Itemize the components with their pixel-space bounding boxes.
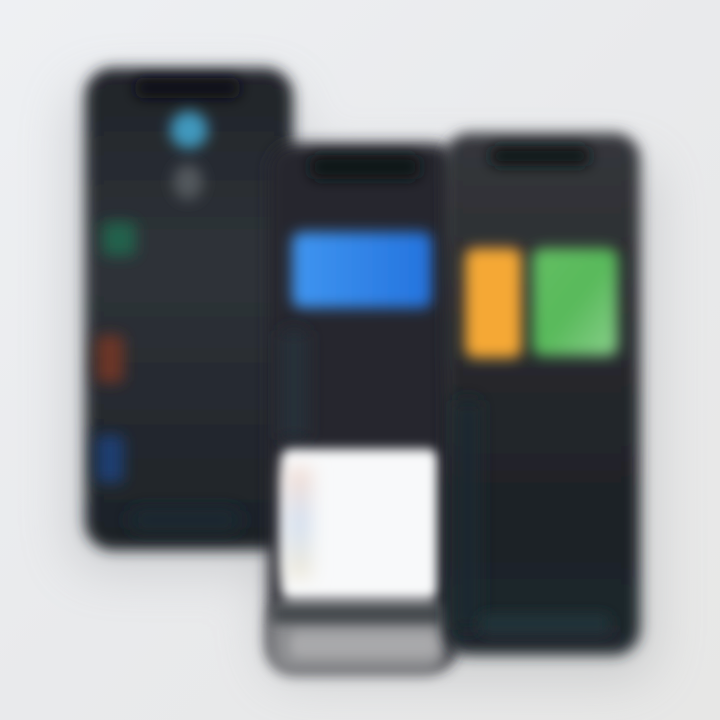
shadows bbox=[70, 85, 655, 680]
dark band under white card bbox=[272, 604, 444, 624]
phone: middle bbox=[268, 143, 458, 675]
list icon: green bbox=[102, 222, 136, 256]
top speaker bbox=[490, 146, 590, 166]
white card bbox=[281, 449, 438, 599]
phone: right bbox=[444, 133, 640, 655]
phone body bbox=[268, 143, 458, 670]
bottom tint bbox=[480, 615, 610, 633]
phone body bbox=[444, 133, 640, 655]
orange card bbox=[465, 248, 522, 358]
app icon: grey circle bbox=[173, 164, 203, 200]
white card colour tint bbox=[286, 468, 312, 578]
app icon: teal circle bbox=[170, 111, 208, 149]
list icon: blue bbox=[96, 435, 124, 483]
list icon: red bbox=[96, 335, 124, 383]
phone: left bbox=[85, 68, 293, 550]
green card bbox=[532, 248, 618, 356]
top speaker bbox=[135, 78, 240, 98]
top speaker bbox=[310, 155, 420, 179]
list tones bbox=[282, 330, 306, 440]
blue card bbox=[292, 232, 432, 308]
bottom tint bbox=[130, 510, 240, 530]
phone body bbox=[85, 68, 293, 550]
teal left edge bbox=[458, 400, 478, 630]
bottom bar bbox=[290, 632, 438, 658]
phone lower lighter body bbox=[268, 600, 448, 675]
